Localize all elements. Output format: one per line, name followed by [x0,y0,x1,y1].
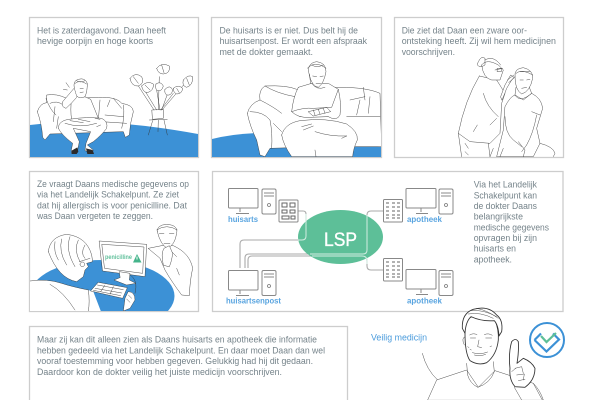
text: panel 2: huisartsenpost. Er wordt een afspraak [220,36,367,46]
illustration: doctor, screen and Daan [30,224,193,313]
text: LSP explanation: apotheek. [474,254,512,264]
LSP ellipse: LSP [324,230,357,251]
blue floor panel 1 [30,122,198,157]
panel: huisartsenpost bellen [212,18,382,158]
document: apotheek bottom [384,258,402,281]
panel: oorontsteking [394,18,564,158]
icon: warning triangle [133,254,142,262]
text: penicilline warning: penicilline [105,254,132,261]
text: LSP explanation: medische gegevens [474,222,549,232]
panel: medische gegevens opvragen [28,170,200,312]
computer: apotheek bottom [406,270,453,306]
text: panel 4: dat hij allergisch is voor penicilline. Dat [37,200,187,210]
icon: safe medication logo [530,323,564,357]
text: panel 3: voorschrijven. [402,47,455,57]
text: LSP explanation [474,180,549,264]
document: apotheek top [384,200,402,222]
text: LSP explanation: huisarts en [474,244,516,254]
document: huisarts [279,200,298,222]
computer: huisartsenpost: huisartsenpost [226,296,281,306]
illustration: Daan phoning on sofa [247,62,382,157]
computer: huisartsenpost [226,270,281,306]
text: panel 4 [36,179,189,221]
computer: apotheek top: apotheek [407,214,442,224]
blue floor panel 2 [212,133,381,157]
connector lines [240,211,383,270]
text: panel 3: Die ziet dat Daan een zware oor- [402,26,527,36]
text: panel 4: via het Landelijk Schakelpunt. Ze ziet [37,190,179,200]
computer: apotheek bottom: apotheek [407,296,442,306]
text: panel 3 [402,26,556,57]
text: panel 6: vooraf toestemming voor hebben gegeven. Gelukkig had hij dit gedaan. [37,356,313,366]
blue table [37,260,174,311]
text: panel 6: Daardoor kon de dokter veilig het juiste medicijn voorschrijven. [37,367,282,377]
text: panel 1: hevige oorpijn en hoge koorts [37,36,153,46]
text: panel 1: Het is zaterdagavond. Daan heeft [37,26,166,36]
text: panel 4: was Daan vergeten te zeggen. [36,211,153,221]
heading: Veilig medicijn: Veilig medicijn [371,333,427,343]
panel: zaterdagavond [30,18,198,158]
panel: LSP network [212,172,563,312]
text: panel 6 [37,335,325,377]
computer: huisarts: huisarts [228,214,258,224]
text: LSP explanation: de dokter Daans [474,201,537,211]
text: LSP explanation: opvragen bij zijn [474,233,537,243]
text: panel 6: hebben gedeeld via het Landelijk Schakelpunt. En daar moet Daan dan wel [37,346,325,356]
text: panel 2 [220,26,367,57]
LSP ellipse [298,210,383,264]
illustration: doctor examines ear [458,57,555,157]
text: panel 2: De huisarts is er niet. Dus belt hij de [220,26,358,36]
text: LSP explanation: Via het Landelijk [474,180,537,190]
text: panel 4: Ze vraagt Daans medische gegevens op [37,179,189,189]
illustration: Daan on sofa with earache [37,64,193,154]
illustration: man with raised finger [422,308,543,400]
computer: apotheek top [406,188,453,224]
text: panel 2: met de dokter gemaakt. [220,47,313,57]
text: LSP explanation: belangrijkste [474,212,523,222]
computer: huisarts [228,188,276,224]
panel: toestemming [30,326,348,400]
text: panel 3: ontsteking heeft. Zij wil hem medicijnen [402,36,556,46]
text: panel 1 [37,26,166,46]
text: panel 6: Maar zij kan dit alleen zien als Daans huisarts en apotheek die informatie [37,335,317,345]
text: LSP explanation: Schakelpunt kan [474,190,537,200]
